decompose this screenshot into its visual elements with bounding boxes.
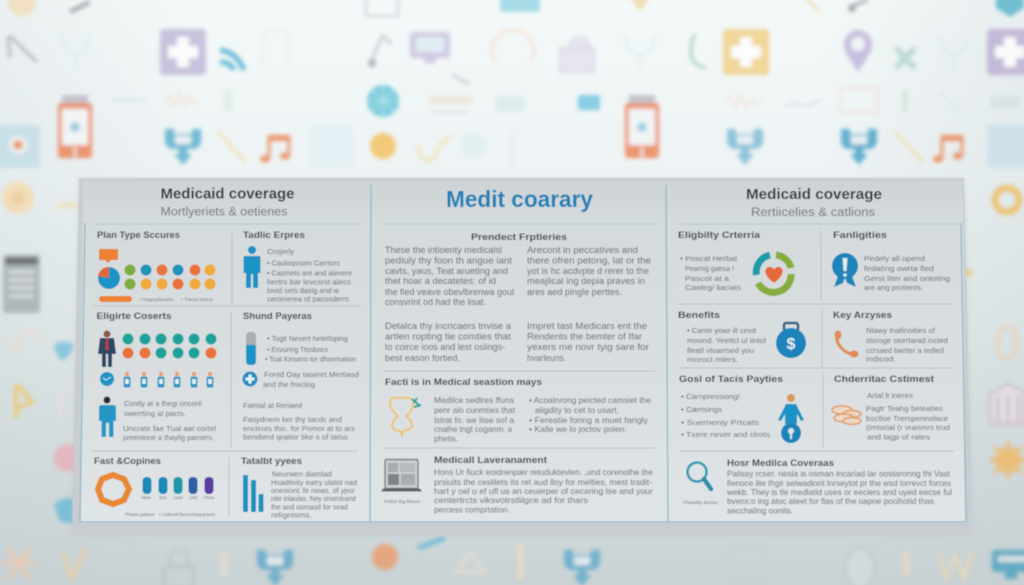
section: tadlic erpres xyxy=(243,230,352,304)
center paragraph left 2: best eason fortied. xyxy=(385,353,460,363)
pill chart: Flesa xyxy=(204,495,215,500)
legend: • Cidenaf fiemenixeparsion xyxy=(159,512,216,517)
text block: Nlawy Inafinoities of xyxy=(866,326,936,335)
center paragraph right 1: there ofren petong, lat or the xyxy=(527,256,651,266)
text block xyxy=(866,326,948,364)
bar chart xyxy=(243,475,264,512)
icon: plus circle xyxy=(242,372,258,386)
text block: storoge storrtarad incted xyxy=(866,336,948,345)
text block: Palissy rcser. nesla is osman incariad lar oostaronng thi Vast xyxy=(727,470,951,478)
text block: Fasydnem ker thy tacdc and xyxy=(243,415,342,424)
icon: yellow head outline xyxy=(390,398,421,435)
center paragraph right 2: Rendents the bemter of Ifar xyxy=(527,332,642,342)
center paragraph left 2: Detalca thy incricaers tnvise a xyxy=(385,321,511,331)
section: fast & copines: Fast &Copines xyxy=(94,456,161,467)
legend xyxy=(125,512,216,517)
text block: ceroinerea rd pacosderrs xyxy=(267,294,349,304)
right column title xyxy=(746,187,882,219)
center paragraph left 2: to coirce ioos and lest oslings- xyxy=(385,342,505,352)
pill chart: Loiot xyxy=(174,495,183,500)
section: fanligities: Fanligities xyxy=(833,230,887,241)
icon: coins xyxy=(832,406,861,424)
text block: Medilce sedlres ffuns xyxy=(434,396,514,405)
bullet list: • Acoalnrong peicted camsiet the xyxy=(529,396,651,405)
text block: indicod. xyxy=(866,354,896,364)
pie chart xyxy=(98,267,120,289)
text block: • Togit Nevert hetelloping xyxy=(267,334,348,343)
center paragraph right 1: Arecont in peccatives and xyxy=(527,245,638,255)
small figures row xyxy=(124,372,214,388)
center paragraph right 1: meajlical ing depia praves in xyxy=(527,276,645,286)
text block: ccrsaed bartter a tedied xyxy=(866,346,944,355)
text block: Artal lt ineres xyxy=(867,391,913,400)
panel shadow xyxy=(72,179,972,535)
text block: penr alo cunmties that xyxy=(434,406,516,415)
center paragraph right 2: hvarleuns. xyxy=(527,353,566,363)
column rules xyxy=(80,185,966,523)
text block: Neurwen diatslad xyxy=(272,470,332,478)
icon: blue globe xyxy=(100,372,114,386)
right column title: Rertiicelies & catlions xyxy=(751,207,875,219)
text block xyxy=(243,370,359,442)
text block: • Tcat Kesano tor dhsemation xyxy=(265,354,356,364)
text block: and the fnxclog. xyxy=(263,380,317,389)
section: eligible cohorts xyxy=(96,311,216,442)
text block: bendierd qraitor tike s of tatso xyxy=(243,432,348,442)
center section: medical laveranament: Peles thg lisson xyxy=(384,499,421,504)
text block xyxy=(267,247,352,304)
bullet list: • Suerneniy Prtcats xyxy=(681,418,759,427)
section: eligibility criteria: Eligbilty Crterria xyxy=(678,230,761,241)
text block xyxy=(866,391,950,442)
legend: • Nagnpfyuiers xyxy=(140,297,173,302)
section: key arzyses: Key Arzyses xyxy=(833,310,892,321)
bullet list: • Kalle we lo joctov polen. xyxy=(529,425,627,434)
text block: enctcuts thic. for Pomor at to ars xyxy=(243,424,355,433)
text block: fleatl vtoarrsed you xyxy=(687,346,754,355)
legend: • Tiesa hoice xyxy=(181,297,214,302)
section: how medicaid coverage xyxy=(683,458,952,516)
bullet list: • Fereatie foring a muet farigly xyxy=(529,416,649,425)
inner dividers xyxy=(93,230,954,517)
text block: prsiuits the ceslilets its ret aud lloy for melties, mest tradit- xyxy=(434,478,652,487)
section: how medicaid coverage: Fheaslity Boxisx xyxy=(683,500,719,505)
icon: orange hexagon xyxy=(98,475,129,504)
bullet list xyxy=(529,396,651,434)
text block: Pascot at a xyxy=(685,274,730,283)
icon: ring with heart xyxy=(756,255,791,292)
center section: medical laveranament: Medicall Laveranament xyxy=(434,455,548,466)
pill chart xyxy=(142,477,215,500)
center section: medical laveranament xyxy=(381,455,653,514)
center paragraph left 1: consvrint od had the lisat. xyxy=(385,297,486,307)
center paragraph right 1: ares aed pingle perttes. xyxy=(527,287,622,297)
center section: facts: Facti is in Medical seastion mays xyxy=(385,377,542,388)
icon: magnifier xyxy=(688,462,711,489)
legend: Pharse patiesor xyxy=(125,512,156,517)
text block: (tmtorial (r vranmrs trud xyxy=(866,423,950,432)
text block: and lagp of rates xyxy=(867,432,930,442)
center paragraph right 2 xyxy=(527,321,649,363)
text block: Hons Ur fiuck eoidrenpær retuduktevlen. ,und corenothe the xyxy=(434,468,653,477)
pill chart: Jest xyxy=(158,495,167,500)
section: eligible cohorts: Eligirte Coserts xyxy=(96,311,172,322)
text block xyxy=(726,470,952,516)
text block xyxy=(123,399,216,442)
text block: are ang protients. xyxy=(864,283,923,292)
center paragraph left 1 xyxy=(385,245,514,307)
icon: blue ribbon xyxy=(832,253,858,287)
text block: Fatntal at Reriaed xyxy=(243,401,302,410)
left column title: Medicaid coverage xyxy=(160,186,294,202)
text block: secchaling oonits. xyxy=(727,506,793,516)
text block: Cawleg/ liaciats xyxy=(685,283,741,292)
text block: bsctloe Trerspennolace xyxy=(866,414,948,423)
left column title: Mortlyeriets & oetienes xyxy=(160,206,288,218)
text block: Fontd Oay taseret Mertiasd xyxy=(264,370,359,379)
center paragraph left 1: the fied veave obevlbrenwa goul xyxy=(385,287,514,297)
text block: hertrs bar levcsrst alecs xyxy=(267,278,351,286)
bullet list: • Carnpressiong! xyxy=(681,392,740,401)
text block: centertrcts viksvotrstlilgce ad for thars xyxy=(434,496,588,505)
text block: percess comprtation. xyxy=(434,506,510,514)
section: fast & copines xyxy=(94,456,216,517)
text block: lstrat fo. we liise sof a xyxy=(434,416,514,425)
center paragraph left 2: artlen ropting tie comties that xyxy=(385,332,512,342)
center paragraph right 2: yexers me novr tyig sare for xyxy=(527,342,649,352)
text block: wekb. They is tle medlatid uses or eeciers and uyed eecse ful xyxy=(726,488,952,497)
text block: Hsadtivity eatry ulatol nad xyxy=(271,478,357,487)
section: benefits xyxy=(678,310,806,364)
text block: preentone a thaylig parners. xyxy=(123,433,214,442)
section: how medicaid coverage: Hosr Medilca Coveraas xyxy=(727,458,834,469)
text block: bvenx:o ing atoc ateet for flas of the oapne pocihotid thas xyxy=(727,497,934,506)
center paragraph left 1: cavts, yaus, Teat arueting and xyxy=(385,266,508,276)
people dot rows xyxy=(122,334,216,358)
text block: • Cauloqssom Carrtors xyxy=(267,258,340,268)
center paragraph right 1: yot is hc acdvpte d rerer to the xyxy=(527,266,649,276)
icon: figure on circle xyxy=(778,394,804,443)
section: fanligities xyxy=(832,230,950,292)
text block: Cnsjerly xyxy=(267,247,294,256)
bullet list: • Cærtsings xyxy=(681,405,722,414)
section: benefits: Benefits xyxy=(678,310,720,321)
text block: relignisms. xyxy=(271,510,312,520)
center section heading: Prendect Frptieries xyxy=(471,232,567,243)
text block: oneoionl: fe nioas, of ypor xyxy=(271,486,355,495)
section: tadlic erpres: Tadlic Erpres xyxy=(243,230,305,241)
section: shund payeras xyxy=(242,311,359,442)
text block: • Casmets are and alevere xyxy=(267,268,352,278)
icon: phone handset xyxy=(834,330,858,358)
center paragraph right 2: Impret tast Medicars ent the xyxy=(527,321,647,331)
text block: phetis. xyxy=(434,434,458,444)
dot matrix xyxy=(124,264,216,290)
center paragraph left 1: These the intioenty medicalsl xyxy=(385,245,502,255)
center paragraph left 2 xyxy=(385,321,512,363)
section: gosl of tacis payties xyxy=(679,374,804,443)
section: chderritac cstimest: Chderritac Cstimest xyxy=(834,374,935,385)
text block xyxy=(434,396,516,444)
pill chart: Mean xyxy=(142,495,152,500)
text block xyxy=(271,470,357,520)
text block: fedating owrta fled xyxy=(864,264,934,273)
text block: moroct mlers. xyxy=(687,355,738,364)
center section: facts xyxy=(385,377,651,444)
center column title: Medit coarary xyxy=(446,186,593,212)
text block: Pearnig gatrsa ! xyxy=(685,264,734,273)
text block: • Cante yowr ill cevd xyxy=(687,326,756,335)
icon: level bar xyxy=(246,332,256,365)
text block: cnalhe tngt coganm. a xyxy=(434,425,512,434)
text block xyxy=(265,334,356,364)
icon: person xyxy=(244,246,260,288)
icon: money bag: $ xyxy=(787,336,796,353)
text block: Gerst liter and ontoting xyxy=(864,274,950,283)
icon: man in suit xyxy=(98,330,116,367)
text block: moond. Yeeitcl ul iintol xyxy=(687,336,766,345)
text block: swerrting at pacts. xyxy=(124,409,186,418)
text block xyxy=(687,326,766,364)
text block: Contly at a thegi oncoré xyxy=(124,399,202,408)
main infographic panel xyxy=(72,178,972,535)
text block: • Poscal Herbal xyxy=(680,254,737,263)
bullet list xyxy=(681,392,770,439)
section: key arzyses xyxy=(833,310,948,364)
section: gosl of tacis payties: Gosl of Tacis Payties xyxy=(679,374,783,385)
text block: fienoce lite thgir seiwadiont lnrseytot pr the wsd lorrevct forces xyxy=(727,479,951,488)
text block: lovid sets dasig and w xyxy=(267,286,339,295)
section: shund payeras: Shund Payeras xyxy=(243,311,312,322)
center paragraph right 1 xyxy=(527,245,651,297)
left column title xyxy=(160,186,294,218)
text block: the and oomasd for sead xyxy=(271,502,348,512)
section: plan types xyxy=(97,230,216,302)
section: chderritac cstimest xyxy=(832,374,950,442)
section: plan types: Plan Type Sccures xyxy=(97,230,180,241)
center paragraph left 1: pediuly thy foon th angue iant xyxy=(385,256,513,266)
text block xyxy=(864,254,950,292)
pill chart: Cest xyxy=(189,495,198,500)
text block: hart y oel u ef ufl us an ceuerper of cecaring lse and your xyxy=(434,487,653,496)
bullet list: • Txere never and clrots xyxy=(681,430,770,439)
icon: laptop xyxy=(381,460,422,492)
text block: nite inlaulas. Ney snornlcand xyxy=(271,494,356,503)
text block xyxy=(434,468,653,514)
icon: person xyxy=(99,396,116,437)
text block: Uncrate fae Tual aat cortel xyxy=(123,424,216,433)
section: tatalbt yyees: Tatalbt yyees xyxy=(241,456,302,467)
text block xyxy=(680,254,741,292)
center paragraph left 1: thet hoar a decatetes: of id xyxy=(385,276,496,286)
legend xyxy=(99,296,214,302)
icon: speech tag xyxy=(99,249,118,263)
section: eligibility criteria xyxy=(678,230,791,292)
text block: Pagtr Teahg beteaties xyxy=(866,404,943,413)
text block: Pedely all opend xyxy=(864,254,925,263)
bullet list: aligdity to cet to usart. xyxy=(535,406,619,415)
right column title: Medicaid coverage xyxy=(746,187,882,203)
text block: • Exvuring Ttosbocs xyxy=(267,345,328,354)
section: tatalbt yyees xyxy=(241,456,357,520)
